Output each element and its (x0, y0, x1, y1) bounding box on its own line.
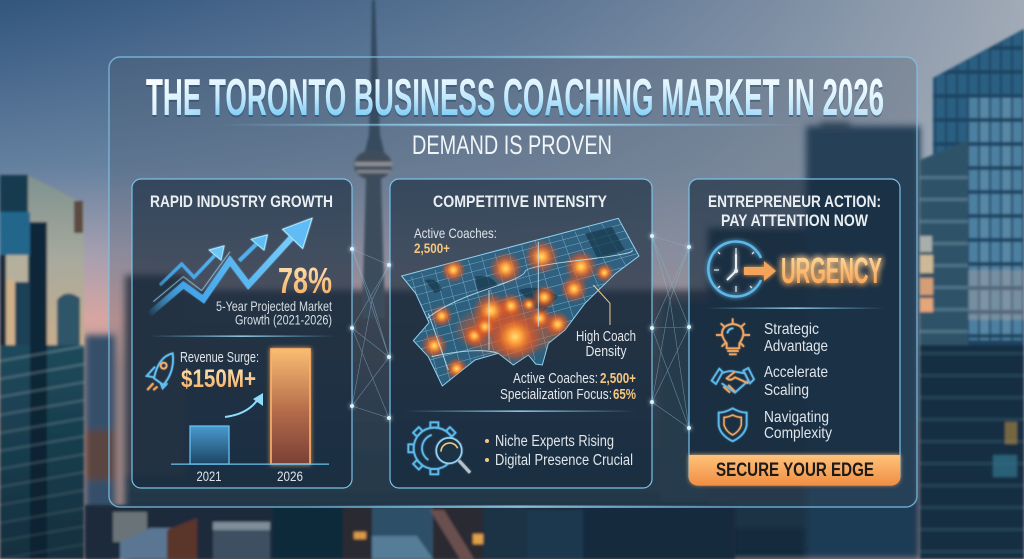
background: street-level buildings (85, 505, 735, 559)
stats: active coaches and specialization focus: Specialization Focus: (500, 387, 612, 403)
icon: handshake (712, 368, 754, 393)
background: right tower (920, 29, 1024, 559)
background: left tower (0, 175, 84, 559)
network nodes on panel edges (350, 234, 691, 430)
label: active coaches: Active Coaches: (414, 225, 497, 241)
stats: active coaches and specialization focus: Active Coaches: (513, 371, 598, 387)
banner: secure your edge (689, 455, 900, 485)
text: urgency: URGENCY (781, 250, 882, 291)
network connector lines between panels (352, 236, 689, 428)
text: strategic advantage (764, 321, 828, 355)
text: navigating complexity: Navigating (764, 409, 829, 426)
map: Toronto coach density heatmap (398, 218, 639, 390)
outer glass panel (109, 56, 917, 508)
label: high coach density: Density (586, 343, 627, 360)
text: strategic advantage: Advantage (764, 338, 828, 355)
text: navigating complexity: Complexity (764, 425, 832, 442)
text: accelerate scaling: Accelerate (764, 364, 828, 381)
bar chart: revenue 2021 vs 2026: 2026 (277, 468, 303, 484)
heading: entrepreneur action: PAY ATTENTION NOW (721, 211, 869, 230)
bar chart: revenue 2021 vs 2026 (171, 349, 329, 484)
panel: competitive intensity (390, 179, 652, 488)
text: accelerate scaling: Scaling (764, 382, 809, 399)
label: 5-year projected market growth (216, 298, 332, 328)
text: strategic advantage: Strategic (764, 321, 819, 338)
banner: secure your edge: SECURE YOUR EDGE (716, 460, 874, 481)
heading: rapid industry growth: RAPID INDUSTRY GROWTH (150, 192, 333, 211)
label: high coach density (576, 328, 636, 360)
heading: competitive intensity: COMPETITIVE INTENSITY (433, 192, 608, 211)
heading: entrepreneur action (708, 192, 881, 230)
subtitle: DEMAND IS PROVEN (412, 130, 612, 160)
icon: rising zigzag arrows (148, 218, 312, 315)
list: market trends (485, 433, 633, 469)
text: accelerate scaling (764, 364, 828, 399)
stats: active coaches and specialization focus: 2,500+ (600, 371, 636, 387)
list: market trends: Digital Presence Crucial (495, 452, 633, 469)
stats: active coaches and specialization focus (500, 371, 636, 403)
icon: clock with arrow (708, 241, 776, 296)
stat: 78%: 78% (278, 260, 332, 301)
label: 5-year projected market growth: Growth (2021-2026) (235, 312, 332, 328)
panel: entrepreneur action (689, 179, 900, 485)
stat: $150M+: $150M+ (181, 365, 256, 393)
text: navigating complexity (764, 409, 832, 442)
icon: light bulb (716, 318, 750, 354)
label: active coaches (414, 225, 497, 256)
label: 5-year projected market growth: 5-Year Projected Market (216, 298, 332, 314)
icon: rocket (147, 353, 173, 390)
bar chart: revenue 2021 vs 2026: 2021 (196, 468, 222, 484)
label: revenue surge: Revenue Surge: (180, 350, 259, 366)
heading: entrepreneur action: ENTREPRENEUR ACTION: (708, 192, 881, 211)
stats: active coaches and specialization focus: 65% (613, 387, 636, 403)
label: active coaches: 2,500+ (414, 240, 450, 256)
panel: rapid industry growth (132, 179, 352, 488)
icon: gear with magnifier (408, 422, 470, 474)
label: high coach density: High Coach (576, 328, 636, 345)
background: CN Tower (354, 0, 392, 318)
list: market trends: Niche Experts Rising (495, 433, 614, 450)
icon: shield (719, 408, 747, 441)
